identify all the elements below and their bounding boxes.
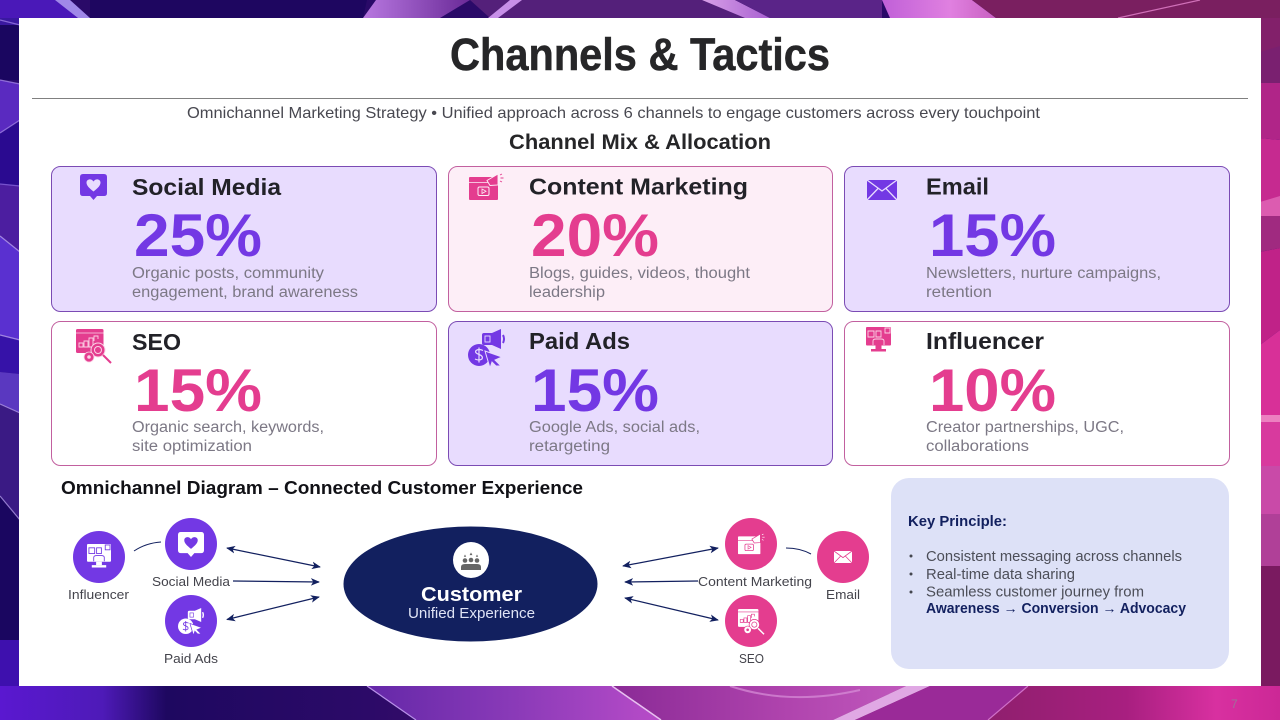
influencer share: 10% bbox=[929, 357, 1056, 424]
key principle bullets: Awareness → Conversion → Advocacy bbox=[926, 601, 1186, 617]
panel: paid ads bbox=[448, 322, 832, 466]
arrow: content marketing to customer bbox=[623, 548, 718, 566]
seo share: 15% bbox=[134, 357, 262, 424]
unified experience label: Unified Experience bbox=[408, 606, 535, 622]
key principle bullets: Consistent messaging across channels bbox=[926, 549, 1182, 565]
icon: customer group bbox=[453, 542, 489, 578]
key principle bullets bbox=[910, 549, 1186, 617]
content marketing description: Blogs, guides, videos, thought bbox=[529, 265, 751, 282]
paid ads description bbox=[529, 419, 700, 455]
node: content marketing: Content Marketing bbox=[698, 575, 812, 589]
node: seo: SEO bbox=[739, 652, 764, 666]
connector: influencer to social media bbox=[134, 542, 161, 551]
panel: key principle bbox=[891, 478, 1229, 669]
page number: 7 bbox=[1231, 697, 1238, 711]
content marketing heading: Content Marketing bbox=[529, 174, 748, 200]
diagram heading: Omnichannel Diagram – Connected Customer Experience bbox=[61, 478, 583, 498]
node: email: Email bbox=[826, 588, 860, 602]
node: influencer: Influencer bbox=[68, 588, 129, 602]
panel: influencer bbox=[844, 322, 1230, 466]
panel: seo bbox=[52, 322, 436, 466]
node: customer hub bbox=[344, 526, 598, 642]
node: content marketing bbox=[698, 518, 812, 589]
arrow: content marketing label to customer bbox=[625, 581, 698, 582]
node: paid ads bbox=[164, 595, 218, 666]
key principle bullets: Real-time data sharing bbox=[926, 567, 1075, 583]
social media description: Organic posts, community bbox=[132, 265, 324, 282]
connector: content marketing to email bbox=[786, 548, 811, 554]
arrow: social media label to customer bbox=[233, 581, 319, 582]
icon: seo chart and magnifier bbox=[76, 329, 111, 363]
arrow: paid ads to customer bbox=[227, 597, 319, 620]
content marketing description: leadership bbox=[529, 284, 605, 301]
panel: content marketing bbox=[448, 166, 832, 312]
influencer description: Creator partnerships, UGC, bbox=[926, 419, 1124, 436]
icon: heart speech bubble bbox=[80, 174, 107, 200]
influencer description: collaborations bbox=[926, 438, 1029, 455]
key principle heading: Key Principle: bbox=[908, 514, 1007, 530]
content marketing share: 20% bbox=[531, 202, 659, 269]
seo description: Organic search, keywords, bbox=[132, 419, 324, 436]
node: seo bbox=[725, 595, 777, 666]
email description: retention bbox=[926, 284, 992, 301]
diagram: omnichannel network bbox=[68, 518, 869, 666]
node: email bbox=[817, 531, 869, 602]
email share: 15% bbox=[929, 202, 1056, 269]
seo description: site optimization bbox=[132, 438, 252, 455]
icon: megaphone and coin bbox=[468, 329, 504, 368]
icon: envelope bbox=[867, 180, 897, 200]
seo heading: SEO bbox=[132, 329, 181, 355]
influencer description bbox=[926, 419, 1124, 455]
paid ads description: Google Ads, social ads, bbox=[529, 419, 700, 436]
icon: monitor bbox=[866, 327, 891, 352]
seo description bbox=[132, 419, 324, 455]
paid ads heading: Paid Ads bbox=[529, 328, 630, 354]
subtitle: Omnichannel Marketing Strategy • Unified approach across 6 channels to engage customers across every touchpoint bbox=[187, 105, 1041, 122]
email description: Newsletters, nurture campaigns, bbox=[926, 265, 1161, 282]
content marketing description bbox=[529, 265, 751, 301]
social media description bbox=[132, 265, 358, 301]
panel: email bbox=[844, 166, 1230, 312]
node: paid ads: Paid Ads bbox=[164, 652, 218, 666]
paid ads share: 15% bbox=[531, 357, 659, 424]
social media heading: Social Media bbox=[132, 174, 281, 200]
customer label: Customer bbox=[421, 584, 522, 606]
node: social media: Social Media bbox=[152, 575, 230, 589]
influencer heading: Influencer bbox=[926, 328, 1044, 354]
title: Channels & Tactics bbox=[450, 29, 830, 80]
arrow: social media to customer bbox=[227, 548, 320, 567]
email heading: Email bbox=[926, 174, 989, 200]
panel: social media bbox=[52, 166, 436, 312]
section heading: channel mix: Channel Mix & Allocation bbox=[509, 131, 771, 154]
key principle bullets: Seamless customer journey from bbox=[926, 584, 1144, 600]
paid ads description: retargeting bbox=[529, 438, 610, 455]
social media description: engagement, brand awareness bbox=[132, 284, 358, 301]
social media share: 25% bbox=[134, 202, 262, 269]
node: social media bbox=[152, 518, 230, 589]
email description bbox=[926, 265, 1161, 301]
arrow: seo to customer bbox=[625, 598, 718, 620]
node: influencer bbox=[68, 531, 129, 602]
icon: content video megaphone bbox=[469, 174, 504, 200]
